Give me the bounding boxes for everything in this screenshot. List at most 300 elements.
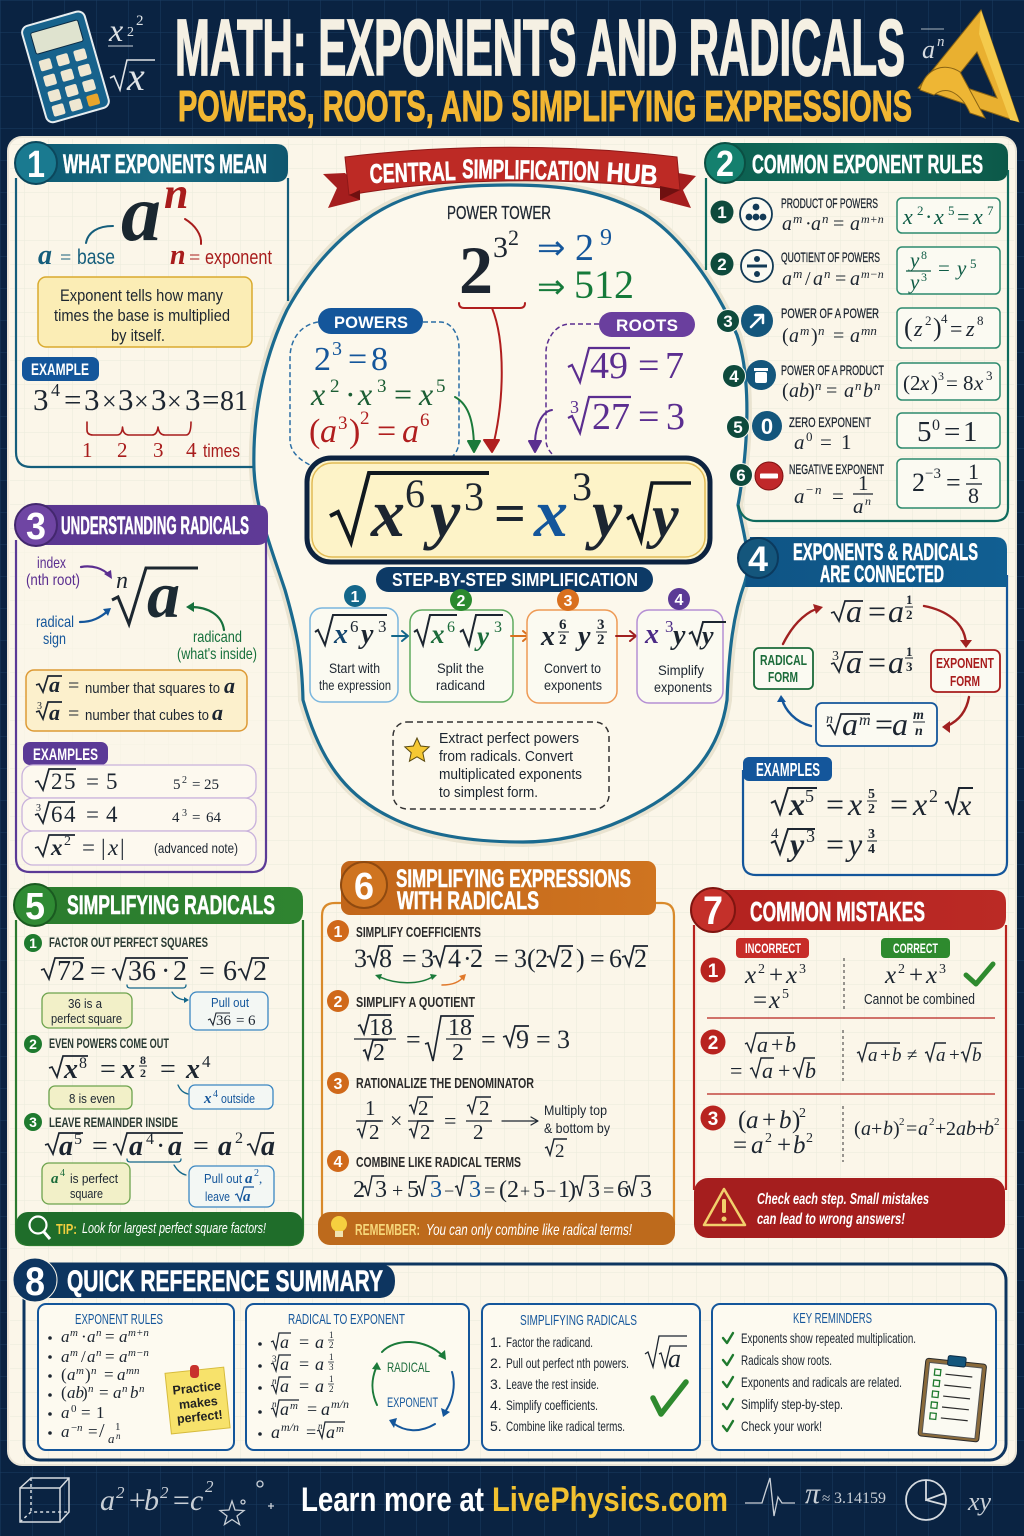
main equation box: x bbox=[533, 475, 568, 551]
step 4: combine like radical terms: ) bbox=[568, 1177, 576, 1203]
box: radical to exponent: a bbox=[315, 1332, 324, 1352]
radical anatomy labels: a bbox=[147, 559, 180, 632]
definitions box: a bbox=[212, 700, 223, 725]
box: exponent rules: 1 bbox=[115, 1421, 120, 1433]
box: simplifying radicals: Leave the rest inside. bbox=[506, 1376, 599, 1392]
example rows: x bbox=[50, 835, 62, 860]
box: radical to exponent: 2 bbox=[329, 1384, 334, 1394]
rule 4: power of a product: 3 bbox=[986, 368, 992, 383]
pi approximation: 3.14159 bbox=[834, 1490, 886, 1507]
box: exponent rules: b bbox=[130, 1383, 138, 1402]
powers group bbox=[290, 308, 459, 465]
rule 1: product of powers: · bbox=[805, 213, 812, 235]
banner: central simplification hub: CENTRAL bbox=[369, 156, 456, 189]
mistake 2: 2 bbox=[708, 1033, 718, 1054]
panel 2 header bbox=[705, 143, 1008, 184]
box: exponent rules bbox=[38, 1304, 234, 1450]
panel 6 header: 6 bbox=[354, 866, 374, 908]
step 2: even powers come out: 2 bbox=[29, 1036, 37, 1052]
mistake 2: a bbox=[762, 1058, 773, 1083]
icon: a to the n: n bbox=[937, 34, 944, 50]
mistake 3: a bbox=[746, 1107, 758, 1134]
panel 8 header: QUICK REFERENCE SUMMARY bbox=[67, 1265, 383, 1298]
math doodle: power and root bbox=[108, 12, 155, 99]
rule 4: power of a product: = bbox=[946, 371, 958, 395]
tip bar bbox=[16, 1212, 303, 1245]
radical-exponent cycle: 3 bbox=[832, 649, 839, 664]
rule 4: power of a product: (2 bbox=[903, 371, 920, 395]
example rows: 64 bbox=[206, 810, 222, 826]
step 1: simplify coefficients: 1 bbox=[334, 924, 343, 941]
mistake 2: = bbox=[730, 1058, 742, 1083]
panel 7 header bbox=[691, 888, 1006, 933]
box: radical to exponent: a bbox=[280, 1354, 289, 1374]
example equation 2: 3 bbox=[806, 826, 815, 846]
rule 1: product of powers: a bbox=[782, 213, 792, 235]
powers group: · bbox=[345, 376, 356, 412]
mistake 1: x bbox=[744, 962, 756, 989]
example rows: 64 bbox=[51, 802, 77, 827]
box: exponent rules: a bbox=[61, 1347, 70, 1366]
mistake 2: ≠ bbox=[907, 1045, 917, 1066]
step 2: even powers come out: x bbox=[63, 1054, 78, 1085]
rule 6: negative exponent: = bbox=[946, 468, 961, 497]
step 3: leave remainder inside: = bbox=[92, 1131, 108, 1162]
example rows: 25 bbox=[51, 769, 77, 794]
step 1: simplify coefficients: SIMPLIFY COEFFICIENTS bbox=[356, 924, 481, 941]
box: radical to exponent: a bbox=[321, 1399, 330, 1419]
rule 6: negative exponent: NEGATIVE EXPONENT bbox=[789, 461, 884, 477]
rule 4: power of a product bbox=[722, 360, 1000, 402]
label: base word: base bbox=[77, 246, 115, 269]
box: simplifying radicals: 1. bbox=[490, 1334, 502, 1350]
example rows: 4 bbox=[106, 802, 119, 827]
panel 6: simplifying expressions with radicals bbox=[318, 861, 675, 1245]
box: radical to exponent: a bbox=[315, 1354, 324, 1374]
step 3 bbox=[527, 589, 617, 703]
rule 1: product of powers: = bbox=[833, 213, 844, 235]
mistake 1: 2 bbox=[898, 962, 905, 977]
step 2: simplify a quotient bbox=[327, 990, 570, 1066]
rule 3: power of a power: z bbox=[965, 316, 975, 341]
example equation 2: 4 bbox=[771, 826, 779, 842]
power tower: 512 bbox=[574, 262, 634, 307]
rule 4: power of a product: ab bbox=[789, 380, 809, 402]
box: key reminders: Radicals show roots. bbox=[741, 1352, 832, 1368]
main equation box: y bbox=[585, 475, 623, 551]
icon: pie chart bbox=[906, 1480, 946, 1520]
powers group: 3 bbox=[377, 376, 386, 397]
step 3: leave remainder inside: a bbox=[51, 1171, 59, 1187]
step 4: combine like radical terms: 2 bbox=[507, 1177, 519, 1203]
example equation: × bbox=[167, 387, 182, 416]
powers group: 3 bbox=[332, 338, 342, 360]
rule 2: quotient of powers: n bbox=[824, 266, 830, 281]
examples tag bbox=[743, 757, 832, 781]
radical-exponent cycle: a bbox=[842, 706, 858, 742]
radical-exponent cycle: FORM bbox=[768, 669, 798, 686]
step 3: rationalize the denominator: 2 bbox=[555, 1141, 564, 1162]
step 1: simplify coefficients: = bbox=[402, 944, 417, 973]
rule 4: power of a product: ) bbox=[808, 380, 815, 402]
central simplification hub bbox=[254, 147, 748, 842]
example equation 1: x bbox=[788, 786, 805, 822]
mistake 1: x bbox=[884, 962, 896, 989]
step 2: simplify a quotient: = bbox=[481, 1025, 496, 1054]
powers group: 3 bbox=[338, 413, 348, 434]
radical-exponent cycle: n bbox=[915, 724, 923, 739]
radical-exponent cycle: a bbox=[846, 644, 862, 680]
rule 2: quotient of powers: 2 bbox=[717, 255, 727, 274]
box: simplifying radicals: Simplify coefficients. bbox=[506, 1397, 598, 1413]
radical-exponent cycle: FORM bbox=[950, 673, 980, 690]
step 2: even powers come out: = bbox=[100, 1054, 116, 1085]
step 4: 4 bbox=[675, 592, 684, 609]
step 2: even powers come out: = bbox=[160, 1054, 176, 1085]
mistake 2: b bbox=[785, 1032, 796, 1057]
count brace bbox=[82, 422, 240, 462]
rule 6: negative exponent: 8 bbox=[968, 483, 979, 508]
radical-exponent cycle: 1 bbox=[906, 592, 912, 607]
panel 5 header: 5 bbox=[25, 886, 45, 928]
mistake 3: b bbox=[779, 1107, 792, 1134]
example equation 1: = bbox=[890, 786, 908, 822]
icon: set square and protractor bbox=[918, 10, 1019, 122]
rule 2: quotient of powers: = bbox=[835, 268, 846, 290]
examples tag: EXAMPLES bbox=[33, 745, 98, 764]
pi approximation: π bbox=[805, 1477, 821, 1510]
rule 2: quotient of powers: a bbox=[850, 268, 860, 290]
label: a = base: a bbox=[38, 240, 52, 271]
radical-exponent cycle: m bbox=[913, 708, 924, 723]
example equation 1: x bbox=[957, 789, 972, 822]
box: key reminders: KEY REMINDERS bbox=[793, 1310, 872, 1327]
rule 5: zero exponent: 0 bbox=[806, 429, 812, 444]
step 1: 3 bbox=[378, 617, 386, 636]
footer bbox=[20, 1477, 992, 1524]
box: exponent rules: m bbox=[70, 1347, 78, 1359]
step 4: combine like radical terms: ( bbox=[499, 1177, 507, 1203]
example tag bbox=[22, 357, 99, 381]
math doodle: power and root: 2 bbox=[127, 25, 134, 40]
mistake 1: 1 bbox=[708, 961, 719, 982]
step 3: leave remainder inside bbox=[24, 1113, 275, 1207]
box: radical to exponent: EXPONENT bbox=[387, 1394, 438, 1410]
count brace: times bbox=[203, 441, 240, 461]
rule 3: power of a power: ) bbox=[933, 313, 942, 342]
step 4: combine like radical terms: 4 bbox=[334, 1154, 343, 1171]
formula: a to the n bbox=[86, 169, 201, 258]
example equation: 81 bbox=[220, 386, 248, 417]
step 3: leave remainder inside: a bbox=[243, 1189, 251, 1205]
panel 1 header bbox=[15, 142, 288, 186]
panel 8 header bbox=[13, 1258, 395, 1304]
step 1: simplify coefficients: 2 bbox=[560, 944, 573, 973]
callout: extract perfect powers: multiplicated exponents bbox=[439, 766, 582, 783]
step 1: simplify coefficients: 2 bbox=[535, 944, 548, 973]
box: simplifying radicals: SIMPLIFYING RADICALS bbox=[520, 1312, 637, 1329]
step 3: leave remainder inside: a bbox=[129, 1131, 143, 1162]
arrow: step 2 to 3 bbox=[511, 631, 529, 641]
formula: pythagoras: + bbox=[127, 1484, 147, 1517]
rule 1: product of powers: a bbox=[850, 213, 860, 235]
rule 3: power of a power: POWER OF A POWER bbox=[781, 305, 879, 321]
count brace: 3 bbox=[153, 438, 164, 462]
step 4: combine like radical terms bbox=[327, 1150, 652, 1203]
power tower: 2 bbox=[575, 227, 594, 269]
box: key reminders: Check your work! bbox=[741, 1418, 822, 1434]
step 4: Simplify bbox=[658, 662, 704, 678]
step 2: simplify a quotient: SIMPLIFY A QUOTIENT bbox=[356, 994, 475, 1011]
step 3: 3 bbox=[597, 617, 604, 633]
rule 6: negative exponent: 2 bbox=[912, 468, 925, 497]
step 1: simplify coefficients: · bbox=[463, 944, 472, 973]
powers group: = bbox=[394, 376, 412, 412]
example rows: = bbox=[192, 810, 200, 826]
rule 1: product of powers: a bbox=[811, 213, 821, 235]
box: exponent rules: n bbox=[88, 1383, 94, 1395]
rule 6: negative exponent: a bbox=[794, 484, 804, 508]
step 3: x bbox=[540, 621, 555, 652]
box: exponent rules: − bbox=[71, 1422, 77, 1434]
definitions box bbox=[26, 670, 247, 731]
box: exponent rules: = bbox=[105, 1327, 115, 1346]
mistake 2: + bbox=[778, 1058, 790, 1083]
mistake 3: 3 bbox=[708, 1109, 718, 1130]
panel 3 header: 3 bbox=[26, 506, 46, 548]
box: exponent rules: a bbox=[61, 1327, 70, 1346]
radical-exponent cycle: 3 bbox=[906, 659, 913, 674]
rule 5: zero exponent: 1 bbox=[841, 430, 852, 454]
panel 1 header: 1 bbox=[27, 144, 45, 186]
step 1: x bbox=[333, 619, 348, 650]
step 3: rationalize the denominator: RATIONALIZE THE DENOMINATOR bbox=[356, 1075, 534, 1092]
definitions box: a bbox=[49, 700, 60, 725]
step 2: 6 bbox=[447, 619, 455, 636]
example equation: × bbox=[102, 387, 117, 416]
mistake 3: a bbox=[861, 1118, 871, 1140]
definitions box: 3 bbox=[37, 701, 42, 712]
mistake 3: 2 bbox=[929, 1116, 934, 1128]
rule 3: power of a power: a bbox=[789, 325, 799, 347]
step 1: factor out perfect squares: · bbox=[161, 956, 170, 987]
mistake 3: a bbox=[918, 1118, 928, 1140]
step 1: factor out perfect squares: FACTOR OUT PERFECT SQUARES bbox=[49, 934, 208, 950]
box: radical to exponent: = bbox=[299, 1354, 309, 1374]
box: radical to exponent: a bbox=[326, 1422, 335, 1442]
formula: pythagoras: = bbox=[171, 1484, 191, 1517]
reminder bar: REMEMBER: bbox=[355, 1222, 420, 1239]
step 3: leave remainder inside: a bbox=[245, 1171, 253, 1187]
box: radical to exponent: a bbox=[280, 1332, 289, 1352]
mistake 2: b bbox=[892, 1045, 902, 1066]
formula: pythagoras: 2 bbox=[160, 1483, 169, 1502]
rule 4: power of a product: a bbox=[844, 380, 854, 402]
box: radical to exponent: m/n bbox=[331, 1397, 349, 1411]
sticky note: Practice bbox=[172, 1379, 222, 1398]
step 2: even powers come out: outside bbox=[221, 1091, 255, 1106]
mistake 3: 2 bbox=[799, 1106, 806, 1121]
callout: exponent definition: times the base is multiplied bbox=[54, 306, 230, 325]
rule 3: power of a power: 3 bbox=[723, 312, 733, 331]
box: exponent rules: a bbox=[119, 1347, 128, 1366]
step 1: factor out perfect squares: = bbox=[236, 1013, 244, 1029]
definitions box: = bbox=[68, 703, 79, 725]
rule 1: product of powers: 1 bbox=[717, 203, 727, 222]
formula: a to the n: n bbox=[164, 169, 188, 218]
step 3: rationalize the denominator: & bottom by bbox=[544, 1120, 610, 1136]
rule 5: zero exponent bbox=[726, 411, 1000, 454]
step 4: y bbox=[670, 620, 686, 651]
box: exponent rules: a bbox=[119, 1327, 128, 1346]
step 4: 3 bbox=[665, 617, 674, 636]
formula: pythagoras: b bbox=[144, 1484, 159, 1517]
step 3: leave remainder inside: , bbox=[259, 1171, 262, 1186]
mistake 2: a bbox=[757, 1032, 768, 1057]
box: exponent rules: a bbox=[87, 1347, 96, 1366]
power tower bbox=[447, 203, 634, 308]
step 3: leave remainder inside: 4 bbox=[60, 1168, 65, 1179]
rule 5: zero exponent: = bbox=[820, 430, 832, 454]
mistake 3: ( bbox=[854, 1118, 861, 1140]
box: radical to exponent: RADICAL TO EXPONENT bbox=[288, 1311, 405, 1328]
step 1: simplify coefficients: 2 bbox=[634, 944, 647, 973]
powers group: = bbox=[377, 413, 396, 450]
step 3: leave remainder inside: a bbox=[168, 1131, 182, 1162]
radical-exponent cycle: a bbox=[892, 706, 908, 742]
step 2: even powers come out: x bbox=[203, 1091, 212, 1107]
pi approximation: ≈ bbox=[822, 1491, 830, 1507]
example rows: 5 bbox=[106, 769, 119, 794]
step 1: simplify coefficients: ) bbox=[576, 944, 585, 973]
step 4: combine like radical terms: 3 bbox=[430, 1177, 442, 1203]
powers group: a bbox=[402, 413, 419, 450]
panel 1: what exponents mean bbox=[15, 142, 288, 467]
example equation: 3 bbox=[118, 382, 134, 417]
mistake 2: b bbox=[972, 1045, 982, 1066]
step 2: simplify a quotient: 18 bbox=[448, 1015, 472, 1041]
powers group: a bbox=[320, 413, 337, 450]
box: exponent rules: · bbox=[81, 1327, 87, 1346]
powers group: 2 bbox=[314, 341, 331, 378]
rule 6: negative exponent: 6 bbox=[736, 466, 746, 485]
step 3: 2 bbox=[559, 632, 566, 648]
step 3: exponents bbox=[544, 677, 602, 693]
step 2: simplify a quotient: = bbox=[536, 1025, 551, 1054]
main equation box: = bbox=[494, 483, 526, 545]
step 1: factor out perfect squares: 36 is a bbox=[68, 996, 103, 1011]
step 3: rationalize the denominator: 2 bbox=[418, 1096, 428, 1120]
box: radical to exponent: n bbox=[318, 1421, 323, 1431]
examples tag: EXAMPLES bbox=[756, 760, 820, 780]
rule 6: negative exponent: 1 bbox=[858, 471, 868, 495]
step 3: leave remainder inside: 5 bbox=[74, 1131, 82, 1148]
rule 6: negative exponent: a bbox=[853, 494, 864, 518]
step heading: STEP-BY-STEP SIMPLIFICATION bbox=[392, 570, 638, 590]
box: exponent rules: n bbox=[91, 1365, 97, 1377]
box: exponent rules: n bbox=[96, 1347, 102, 1359]
mistake 1: x bbox=[785, 962, 797, 989]
callout: extract perfect powers: from radicals. Convert bbox=[439, 748, 574, 765]
rule 3: power of a power: 4 bbox=[941, 311, 948, 326]
arrow: step 1 to 2 bbox=[392, 631, 408, 641]
example equation: 3 bbox=[84, 382, 100, 417]
powers group: 8 bbox=[371, 341, 388, 378]
roots group: 27 bbox=[592, 396, 630, 438]
step 2: 2 bbox=[457, 593, 466, 610]
mistake 2: a bbox=[868, 1045, 878, 1066]
box: simplifying radicals: 3. bbox=[490, 1376, 502, 1392]
step 2: simplify a quotient: = bbox=[406, 1025, 421, 1054]
main equation box: 3 bbox=[572, 464, 592, 509]
rule 5: zero exponent: 5 bbox=[733, 418, 743, 437]
box: exponent rules: ab bbox=[67, 1383, 84, 1402]
mistake 1: 3 bbox=[939, 962, 946, 977]
roots group: 49 bbox=[590, 345, 628, 387]
mistake 1: 2 bbox=[758, 962, 765, 977]
rule 2: quotient of powers: a bbox=[782, 268, 792, 290]
box: exponent rules: = bbox=[104, 1365, 114, 1384]
step 3: rationalize the denominator: × bbox=[390, 1108, 402, 1133]
box: exponent rules: m−n bbox=[128, 1347, 149, 1359]
mistake 1 bbox=[700, 958, 993, 1162]
radical-exponent cycle: m bbox=[859, 712, 871, 729]
roots group bbox=[546, 312, 695, 455]
step 4: combine like radical terms: 3 bbox=[640, 1177, 652, 1203]
definitions box: number that cubes to bbox=[85, 707, 209, 724]
step 1: simplify coefficients: 3 bbox=[354, 944, 367, 973]
panel 4 header bbox=[738, 537, 1007, 588]
step 3: rationalize the denominator: = bbox=[444, 1108, 456, 1133]
example rows: = bbox=[192, 777, 200, 793]
example equation 2: y bbox=[845, 826, 863, 862]
link text: Learn more at bbox=[301, 1481, 484, 1519]
rule 1: product of powers: m+n bbox=[861, 212, 884, 226]
box: exponent rules: a bbox=[87, 1327, 96, 1346]
box: exponent rules: = bbox=[81, 1403, 91, 1422]
step 1: factor out perfect squares: 36 bbox=[216, 1013, 232, 1029]
rule 1: product of powers: x bbox=[902, 204, 913, 229]
radical-exponent cycle: = bbox=[868, 644, 886, 680]
rule 3: power of a power bbox=[716, 305, 1000, 348]
powers group: 2 bbox=[360, 408, 370, 429]
rule 4: power of a product: 4 bbox=[729, 367, 739, 386]
mistake 1: 5 bbox=[782, 987, 789, 1002]
step 4: combine like radical terms: − bbox=[444, 1181, 454, 1201]
example equation: 3 bbox=[185, 382, 200, 417]
formula: pythagoras: 2 bbox=[205, 1477, 214, 1496]
rule 4: power of a product: 8 bbox=[963, 371, 974, 395]
step 3: leave remainder inside: 3 bbox=[29, 1114, 37, 1130]
box: key reminders bbox=[712, 1304, 996, 1450]
example equation 2 bbox=[771, 826, 877, 862]
radical anatomy labels: (nth root) bbox=[26, 572, 80, 589]
rule 2: quotient of powers: QUOTIENT OF POWERS bbox=[781, 249, 880, 265]
rule 2: quotient of powers: 5 bbox=[970, 256, 976, 271]
example equation: = bbox=[202, 382, 219, 417]
step 4: combine like radical terms: 3 bbox=[375, 1177, 387, 1203]
step 4: combine like radical terms: 5 bbox=[407, 1177, 419, 1203]
count brace: 2 bbox=[117, 438, 128, 462]
rule 3: power of a power: 2 bbox=[925, 313, 932, 328]
rule 6: negative exponent: − bbox=[806, 482, 813, 497]
radical anatomy labels: index bbox=[37, 555, 66, 572]
step 1: factor out perfect squares: = bbox=[90, 956, 106, 987]
mistake 1: Cannot be combined bbox=[864, 991, 975, 1008]
rule 4: power of a product: ( bbox=[782, 380, 789, 402]
example equation: = bbox=[64, 382, 81, 417]
step 1: y bbox=[358, 619, 374, 650]
